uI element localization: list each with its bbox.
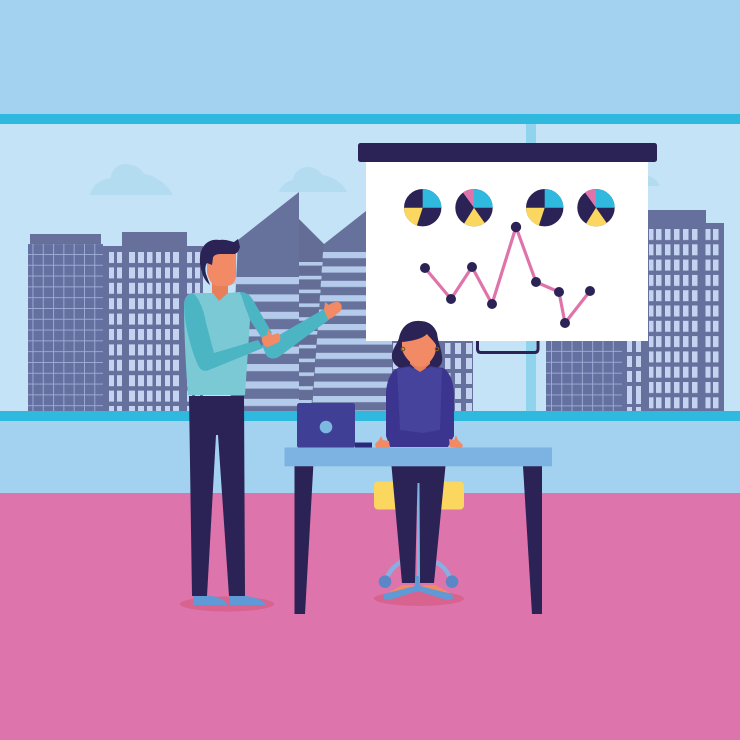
window post <box>526 124 536 411</box>
man trousers <box>189 396 245 596</box>
man face <box>207 254 236 286</box>
man folded arm <box>184 293 263 371</box>
building: narrow centre block <box>299 219 324 411</box>
building: peaked striped block <box>225 192 299 411</box>
laptop <box>297 403 372 448</box>
woman back hair <box>392 321 442 368</box>
desk right leg <box>523 466 542 614</box>
laptop logo <box>320 421 332 433</box>
floor <box>0 493 740 740</box>
left city buildings <box>28 192 473 411</box>
building: window block right <box>622 340 650 411</box>
woman trousers <box>392 466 446 583</box>
laptop base <box>355 442 372 448</box>
man shoes <box>193 596 266 605</box>
building: low block behind the woman <box>392 340 473 411</box>
woman shadow <box>374 591 464 606</box>
chair base <box>379 562 458 588</box>
woman earrings <box>401 347 439 351</box>
lower wall <box>0 421 740 493</box>
upper wall <box>0 0 740 114</box>
man presenting <box>180 239 342 612</box>
man raised arm <box>240 292 330 359</box>
man lower hand <box>262 329 280 347</box>
screen surface <box>366 160 648 341</box>
sky through window <box>0 124 740 411</box>
building: tall tower right <box>648 210 724 411</box>
building: window tower left <box>103 232 203 411</box>
pie chart 3 <box>526 189 563 226</box>
window frame bottom <box>0 411 740 421</box>
woman seated <box>375 321 463 600</box>
man neck <box>212 275 228 302</box>
woman face <box>402 334 436 367</box>
man hair <box>200 239 240 285</box>
building: grid block right <box>546 340 625 411</box>
pie chart 4 <box>577 189 615 226</box>
line chart <box>420 222 595 328</box>
pie chart 1 <box>404 189 441 226</box>
chair seat <box>374 482 464 510</box>
screen handle <box>478 339 538 352</box>
clouds <box>90 164 660 195</box>
building: grid tower left <box>28 234 103 411</box>
woman sweater panel <box>397 367 442 433</box>
man shadow <box>180 596 274 612</box>
woman shoes <box>384 576 453 600</box>
chair <box>374 482 464 606</box>
screen top bar <box>358 143 657 162</box>
woman right hand <box>449 435 463 448</box>
pie chart 2 <box>455 189 493 226</box>
desk top <box>284 448 552 466</box>
right city buildings <box>546 210 724 411</box>
desk left leg <box>294 466 313 614</box>
chair pole <box>417 482 420 582</box>
woman sweater <box>386 366 454 447</box>
building: right peaked striped block <box>312 211 392 411</box>
window frame top <box>0 114 740 124</box>
man sweater <box>184 292 250 395</box>
desk <box>284 448 552 614</box>
woman neck <box>410 355 430 373</box>
woman left hand <box>375 436 390 448</box>
man raised hand <box>324 302 342 319</box>
presentation screen <box>358 143 657 352</box>
